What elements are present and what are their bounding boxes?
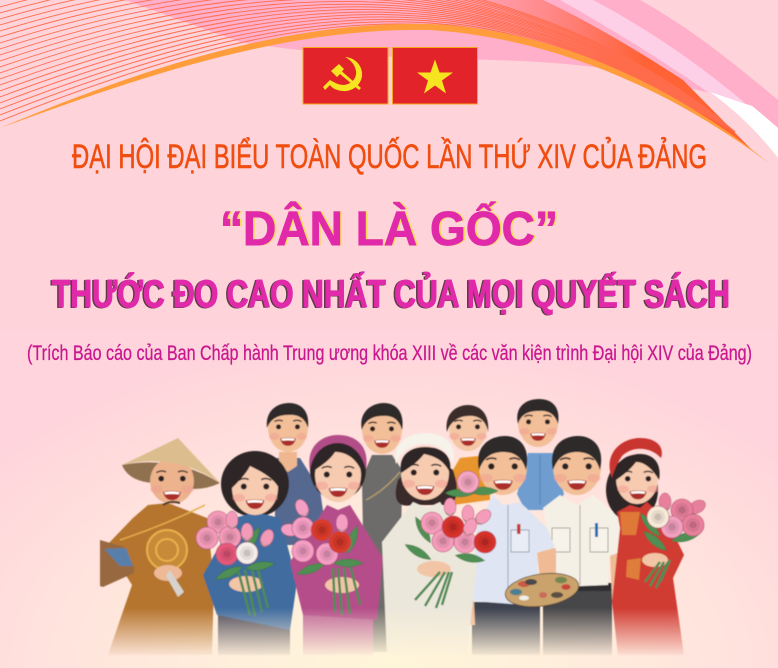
icon: hammer and sickle <box>323 57 362 91</box>
pink band <box>125 0 778 128</box>
person: woman in red ao dai <box>606 438 684 655</box>
bouquet: lotus in blue woman's hands <box>196 511 276 616</box>
person: woman in magenta with hat <box>290 435 383 655</box>
illustration: group of people <box>100 399 708 655</box>
flag: party flag <box>303 48 388 104</box>
person: man in light blue shirt <box>461 436 556 655</box>
hat cone <box>122 438 220 483</box>
person: back man in grey tunic <box>361 403 403 652</box>
bouquet: roses in magenta woman's hands <box>280 497 363 615</box>
heading: main slogan: “DÂN LÀ GỐC” <box>220 201 558 256</box>
hat underside <box>122 462 220 489</box>
person: back man in blue tunic <box>267 403 328 545</box>
book <box>100 540 134 587</box>
person: woman in blue ao ba ba <box>203 451 297 655</box>
person: farmer in conical hat <box>100 438 220 655</box>
light stripe <box>560 0 745 103</box>
person: woman in white ao dai <box>382 433 477 655</box>
bouquet: small pink rose <box>445 471 498 497</box>
bouquet: flowers in red ao dai woman's hands <box>637 493 708 588</box>
flag: national flag <box>392 48 478 104</box>
icon: gold star <box>417 60 453 94</box>
icon: painter's palette <box>504 572 580 608</box>
person: back man in denim shirt <box>517 399 564 510</box>
white ribbon <box>710 92 778 158</box>
orange swoosh <box>0 24 770 164</box>
decorative ribbon waves <box>0 0 778 164</box>
person: man in white shirt <box>543 436 629 655</box>
person: back woman in orange <box>447 405 490 505</box>
bouquet: roses in white ao dai woman's hands <box>403 498 496 608</box>
red line mesh <box>0 0 735 132</box>
